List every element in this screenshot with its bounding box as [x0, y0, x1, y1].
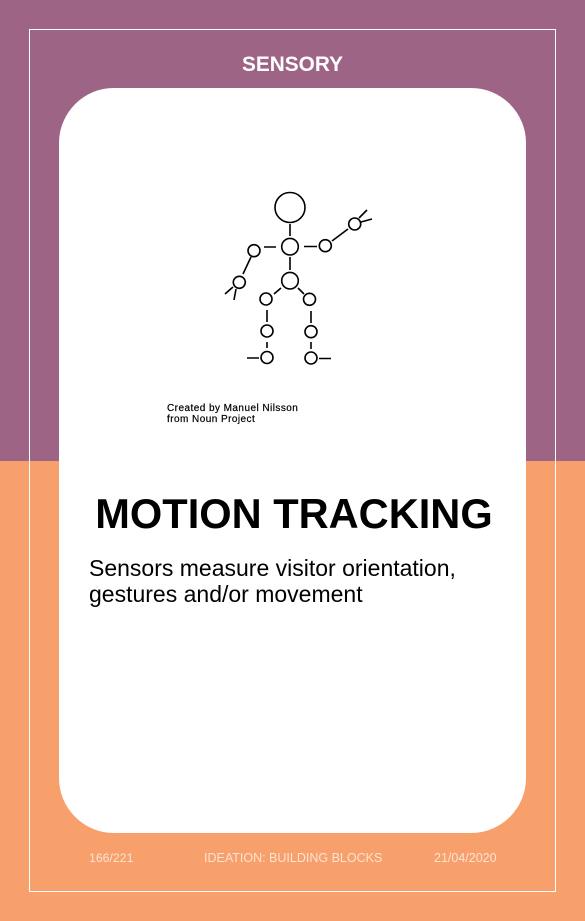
footer: deck name: IDEATION: BUILDING BLOCKS — [204, 851, 382, 865]
white rounded card — [59, 88, 526, 833]
footer: page number: 166/221 — [89, 851, 133, 865]
background: purple top band — [0, 0, 585, 461]
description: Sensors measure visitor orientation, — [89, 555, 456, 581]
icon attribution — [167, 403, 298, 425]
category heading: SENSORY — [242, 53, 343, 76]
icon attribution: from Noun Project — [167, 414, 255, 425]
icon attribution: Created by Manuel Nilsson — [167, 403, 298, 414]
footer: date: 21/04/2020 — [434, 851, 497, 865]
icon: motion tracking stick figure — [224, 192, 372, 365]
description: gestures and/or movement — [89, 581, 363, 607]
description — [89, 555, 456, 607]
background: orange bottom band — [0, 461, 585, 921]
title: MOTION TRACKING — [95, 490, 493, 537]
